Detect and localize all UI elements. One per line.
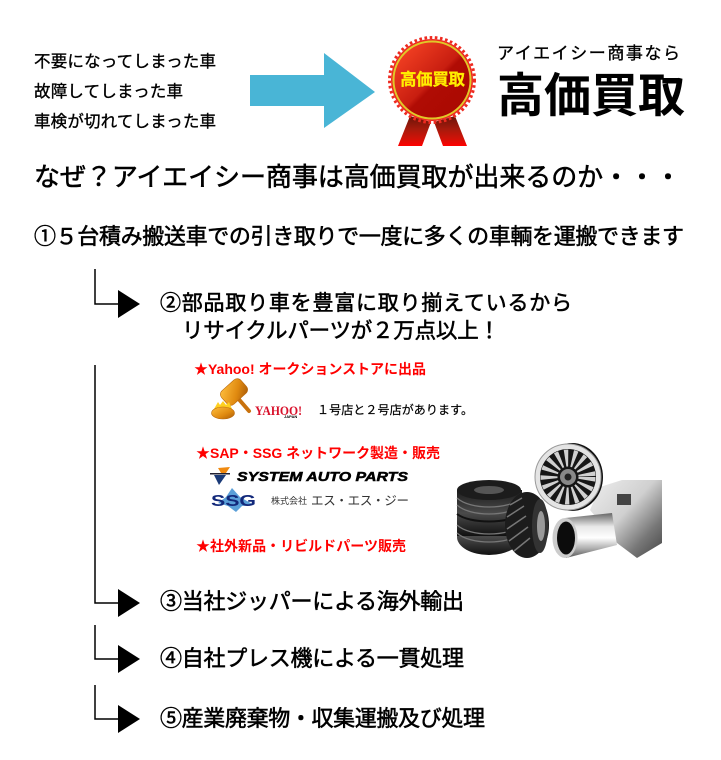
text block: reasons list: 故障してしまった車 — [34, 82, 183, 101]
text block: reasons list: 車検が切れてしまった車 — [34, 112, 216, 131]
logo: SSG: エス・エス・ジー — [311, 494, 409, 508]
step 3 text: ③当社ジッパーによる海外輸出 — [160, 589, 464, 614]
ribbon left — [398, 116, 431, 146]
wheel — [535, 443, 603, 511]
logo: system auto parts — [210, 467, 408, 485]
medal serrated edge — [390, 38, 474, 122]
text block: reasons list: 不要になってしまった車 — [34, 52, 216, 71]
exhaust pipe — [552, 513, 617, 558]
logo: SSG — [211, 488, 409, 512]
step 2 text: ②部品取り車を豊富に取り揃えているから — [160, 292, 572, 315]
label: SAP SSG network: ★SAP・SSG ネットワーク製造・販売 — [196, 445, 440, 461]
medal label: 高価買取 — [400, 69, 466, 89]
arrow: blue right arrow — [250, 53, 375, 128]
logo: Yahoo Japan: YAHOO! — [255, 403, 302, 418]
muffler — [590, 480, 662, 558]
icon: red medal badge — [390, 38, 474, 146]
arrow: connector to step 5 — [95, 685, 140, 733]
label: Yahoo auction store: ★Yahoo! オークションストアに出品 — [194, 361, 426, 377]
step 2 text: リサイクルパーツが２万点以上！ — [182, 319, 500, 343]
image: tires, wheel and muffler — [457, 443, 662, 558]
label: aftermarket and rebuilt parts: ★社外新品・リビルドパーツ販売 — [196, 538, 406, 554]
step 5 text: ⑤産業廃棄物・収集運搬及び処理 — [160, 706, 485, 731]
arrow: connector to step 2 — [95, 269, 140, 318]
step 4 text: ④自社プレス機による一貫処理 — [160, 646, 464, 671]
logo: system auto parts: SYSTEM AUTO PARTS — [237, 469, 408, 484]
icon: gavel — [212, 377, 250, 419]
arrow: connector to step 3 — [95, 365, 140, 617]
heading: why question: なぜ？アイエイシー商事は高価買取が出来るのか・・・ — [34, 162, 681, 192]
medal disc — [394, 42, 470, 118]
tire stack — [457, 480, 522, 555]
text: two stores note: １号店と２号店があります。 — [317, 402, 473, 417]
logo: Yahoo Japan: JAPAN — [284, 414, 297, 419]
step 1 text: ①５台積み搬送車での引き取りで一度に多くの車輌を運搬できます — [34, 224, 684, 249]
text block: reasons list — [34, 52, 216, 131]
heading: high price purchase: 高価買取 — [497, 69, 685, 122]
front tire — [505, 492, 549, 558]
step 2 text — [160, 292, 572, 343]
ribbon right — [434, 116, 467, 146]
logo: SSG: SSG — [211, 493, 256, 510]
heading: company name: アイエイシー商事なら — [497, 44, 680, 63]
logo: SSG: 株式会社 — [271, 495, 307, 506]
arrow: connector to step 4 — [95, 625, 140, 673]
